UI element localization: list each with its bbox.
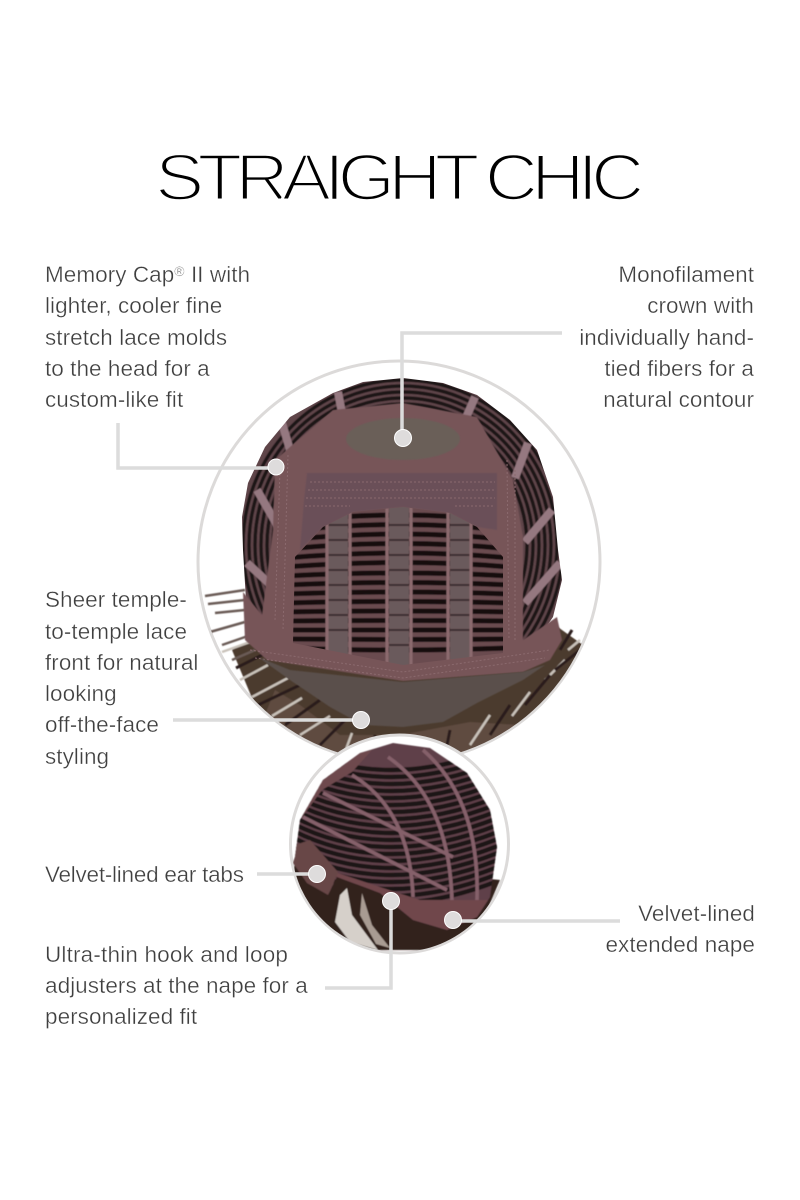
hair behind cap	[204, 588, 582, 752]
text block: adjusters: adjusters at the nape for a	[45, 973, 308, 998]
front lace	[258, 657, 545, 727]
text block: memory cap: ®	[174, 263, 185, 279]
nape band	[335, 872, 495, 932]
text block: monofilament crown: crown with	[647, 293, 754, 318]
text block: lace front: to-temple lace	[45, 619, 187, 644]
text block: adjusters: Ultra-thin hook and loop	[45, 942, 288, 967]
panel: back cap view	[285, 735, 508, 953]
text block: adjusters: personalized fit	[45, 1004, 198, 1029]
text block: memory cap: custom-like fit	[45, 387, 184, 412]
cap frame	[243, 403, 562, 681]
back view hair	[292, 860, 500, 950]
text block: memory cap: Memory Cap	[45, 262, 174, 287]
text block: lace front: off-the-face	[45, 712, 159, 737]
text block: adjusters	[45, 942, 308, 1029]
monofilament crown	[346, 418, 460, 460]
text block: monofilament crown: individually hand-	[579, 325, 754, 350]
text block: lace front: front for natural	[45, 650, 198, 675]
temple band	[300, 473, 497, 550]
hair wefts, cap crown	[242, 378, 562, 640]
text block: lace front: Sheer temple-	[45, 587, 187, 612]
connector: adjusters	[325, 892, 400, 988]
connector: lace front	[173, 712, 370, 728]
text block: memory cap: II with	[185, 262, 250, 287]
connector: ear tabs	[257, 866, 326, 882]
text block: extended nape: extended nape	[605, 932, 755, 957]
text block: extended nape: Velvet-lined	[638, 901, 755, 926]
text block: ear tabs: Velvet-lined ear tabs	[45, 862, 244, 887]
connector: memory cap	[118, 423, 284, 475]
ear tab	[294, 840, 337, 896]
title: STRAIGHT CHIC	[155, 141, 644, 214]
text block: memory cap: stretch lace molds	[45, 325, 227, 350]
back view wefts	[293, 742, 498, 930]
connector: monofilament crown	[394, 333, 562, 446]
text block: monofilament crown: Monofilament	[618, 262, 755, 287]
ribs	[247, 392, 560, 603]
lace window	[293, 508, 503, 665]
text block: extended nape	[605, 901, 755, 957]
text block: monofilament crown	[579, 262, 755, 412]
panel: front cap view	[198, 361, 600, 770]
text block: monofilament crown: tied fibers for a	[604, 356, 754, 381]
text block: memory cap	[45, 262, 250, 412]
text block: lace front: looking	[45, 681, 117, 706]
text block: monofilament crown: natural contour	[603, 387, 754, 412]
connector: extended nape	[444, 912, 620, 928]
text block: memory cap: lighter, cooler fine	[45, 293, 222, 318]
text block: lace front: styling	[45, 744, 109, 769]
text block: memory cap: to the head for a	[45, 356, 210, 381]
text block: lace front	[45, 587, 198, 769]
